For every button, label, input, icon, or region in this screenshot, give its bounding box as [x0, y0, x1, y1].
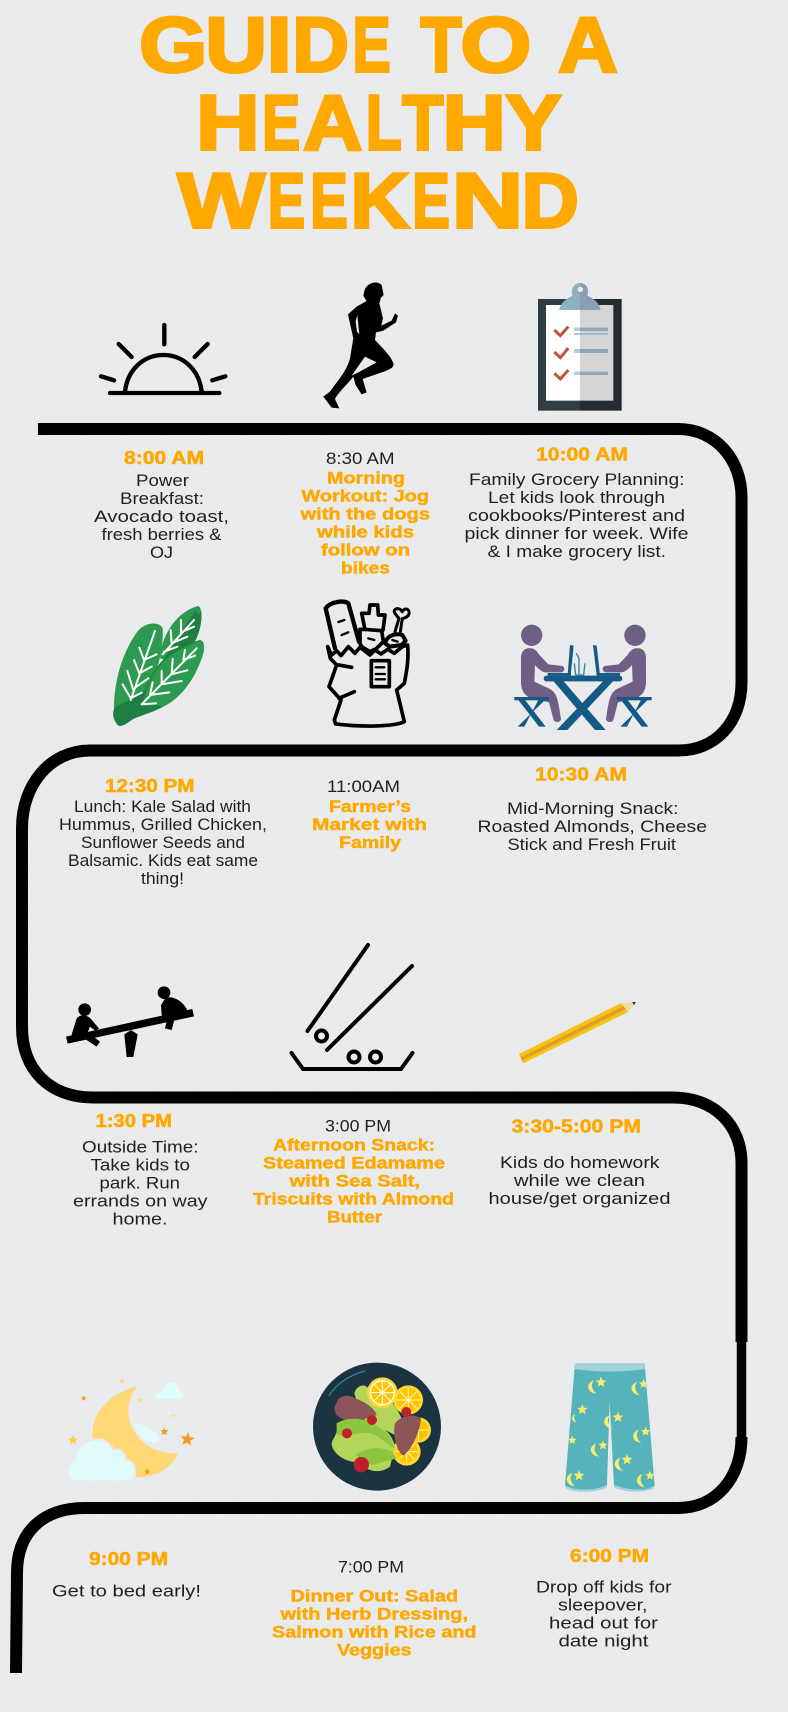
- title: E: [268, 156, 305, 244]
- icon: grocery bag: [326, 602, 409, 726]
- icon: kale leaves: [113, 606, 204, 726]
- column: 6:00 PM date night: sleepover,: [558, 1596, 648, 1614]
- column: 3:30-5:00 PM homework: Kids do homework: [500, 1154, 660, 1172]
- title: E: [412, 156, 450, 244]
- column: 1:30 PM outside time: [73, 1111, 208, 1228]
- column: 10:30 AM mid-morning snack: Roasted Almonds, Cheese: [478, 818, 707, 836]
- column: 6:00 PM date night: head out for: [549, 1614, 659, 1632]
- column: 8:30 AM morning workout: bikes: [341, 560, 390, 578]
- title: T: [420, 0, 462, 88]
- column: 12:30 PM lunch: thing!: [141, 870, 184, 888]
- title: E: [352, 0, 391, 88]
- column: 3:30-5:00 PM homework: 3:30-5:00 PM: [512, 1116, 641, 1136]
- column: 10:00 AM family grocery planning: 10:00 AM: [536, 444, 628, 464]
- icon: moon, clouds and stars: [68, 1378, 195, 1481]
- title: [139, 0, 618, 244]
- column: 11:00AM farmer's market: [312, 778, 427, 852]
- column: 8:00 AM breakfast: 8:00 AM: [124, 448, 204, 468]
- column: 8:30 AM morning workout: Morning: [327, 470, 405, 488]
- column: 6:00 PM date night: date night: [558, 1632, 649, 1650]
- title: W: [178, 156, 265, 244]
- column: 8:00 AM breakfast: Breakfast:: [120, 490, 204, 508]
- column: 12:30 PM lunch: [59, 776, 267, 888]
- column: 10:00 AM family grocery planning: [464, 444, 688, 561]
- column: 7:00 PM dinner out: with Herb Dressing,: [279, 1606, 468, 1624]
- column: 3:00 PM afternoon snack: Butter: [327, 1208, 383, 1226]
- column: 8:30 AM morning workout: 8:30 AM: [326, 450, 394, 468]
- column: 7:00 PM dinner out: Veggies: [337, 1642, 412, 1660]
- column: 1:30 PM outside time: 1:30 PM: [96, 1111, 172, 1131]
- runner leg gap: [352, 357, 377, 376]
- column: 11:00AM farmer's market: Family: [339, 834, 402, 852]
- title: Y: [506, 78, 562, 166]
- icon: salad plate: [313, 1363, 441, 1491]
- title: E: [262, 78, 300, 166]
- title: N: [452, 156, 523, 244]
- column: 10:30 AM mid-morning snack: 10:30 AM: [535, 764, 627, 784]
- icon: seesaw with kids: [66, 986, 194, 1057]
- column: 6:00 PM date night: [536, 1546, 672, 1650]
- column: 8:00 AM breakfast: Avocado toast,: [94, 508, 229, 526]
- title: H: [442, 78, 506, 166]
- column: 12:30 PM lunch: 12:30 PM: [105, 776, 194, 796]
- column: 9:00 PM bedtime: Get to bed early!: [52, 1582, 201, 1600]
- column: 8:30 AM morning workout: follow on: [321, 542, 410, 560]
- column: 10:00 AM family grocery planning: Let kids look through: [488, 489, 665, 507]
- column: 10:30 AM mid-morning snack: [478, 764, 707, 854]
- icon: pencil: [519, 1002, 636, 1064]
- column: 12:30 PM lunch: Hummus, Grilled Chicken,: [59, 816, 267, 834]
- column: 1:30 PM outside time: Outside Time:: [82, 1138, 198, 1156]
- column: 11:00AM farmer's market: Farmer’s: [329, 798, 411, 816]
- column: 8:00 AM breakfast: OJ: [150, 544, 173, 562]
- title: K: [350, 156, 410, 244]
- icon: sunrise: [101, 325, 225, 393]
- column: 6:00 PM date night: 6:00 PM: [570, 1546, 649, 1566]
- column: 10:30 AM mid-morning snack: Mid-Morning Snack:: [507, 800, 678, 818]
- column: 12:30 PM lunch: Balsamic. Kids eat same: [68, 852, 258, 870]
- column: 3:30-5:00 PM homework: while we clean: [513, 1172, 645, 1190]
- column: 7:00 PM dinner out: [272, 1558, 476, 1660]
- column: 1:30 PM outside time: home.: [112, 1210, 168, 1228]
- title: D: [522, 156, 579, 244]
- column: 7:00 PM dinner out: Dinner Out: Salad: [290, 1588, 458, 1606]
- title: A: [558, 0, 618, 88]
- column: 3:00 PM afternoon snack: [253, 1118, 454, 1226]
- column: 1:30 PM outside time: park. Run: [100, 1174, 180, 1192]
- column: 7:00 PM dinner out: Salmon with Rice and: [272, 1624, 476, 1642]
- column: 8:00 AM breakfast: fresh berries &: [102, 526, 222, 544]
- column: 10:00 AM family grocery planning: pick dinner for week. Wife: [464, 525, 688, 543]
- column: 10:30 AM mid-morning snack: Stick and Fresh Fruit: [508, 836, 676, 854]
- icon: chopsticks with edamame: [292, 945, 412, 1069]
- column: 1:30 PM outside time: errands on way: [73, 1192, 208, 1210]
- title: G: [139, 0, 207, 88]
- column: 3:30-5:00 PM homework: house/get organized: [488, 1190, 670, 1208]
- column: 8:30 AM morning workout: while kids: [316, 524, 414, 542]
- title: A: [303, 78, 362, 166]
- column: 1:30 PM outside time: Take kids to: [90, 1156, 190, 1174]
- column: 12:30 PM lunch: Sunflower Seeds and: [81, 834, 245, 852]
- column: 8:00 AM breakfast: [94, 448, 229, 562]
- column: 10:00 AM family grocery planning: cookbooks/Pinterest and: [468, 507, 685, 525]
- column: 3:00 PM afternoon snack: Afternoon Snack:: [273, 1136, 435, 1154]
- column: 8:30 AM morning workout: [299, 450, 430, 578]
- column: 3:30-5:00 PM homework: [488, 1116, 670, 1208]
- title: E: [310, 156, 348, 244]
- icon: runner silhouette: [323, 282, 398, 408]
- icon: clipboard checklist: [538, 283, 622, 411]
- title: D: [292, 0, 349, 88]
- column: 8:30 AM morning workout: Workout: Jog: [302, 488, 429, 506]
- column: 6:00 PM date night: Drop off kids for: [536, 1578, 672, 1596]
- column: 8:30 AM morning workout: with the dogs: [299, 506, 430, 524]
- column: 11:00AM farmer's market: Market with: [312, 816, 427, 834]
- column: 3:00 PM afternoon snack: Triscuits with Almond: [253, 1190, 454, 1208]
- column: 8:00 AM breakfast: Power: [136, 472, 190, 490]
- column: 3:00 PM afternoon snack: 3:00 PM: [325, 1118, 391, 1136]
- title: U: [205, 0, 267, 88]
- column: 12:30 PM lunch: Lunch: Kale Salad with: [74, 798, 251, 816]
- column: 11:00AM farmer's market: 11:00AM: [327, 778, 400, 796]
- column: 9:00 PM bedtime: 9:00 PM: [89, 1549, 168, 1569]
- column: 3:00 PM afternoon snack: Steamed Edamame: [263, 1154, 445, 1172]
- title: O: [460, 0, 531, 88]
- icon: two people at table: [514, 625, 652, 730]
- title: I: [267, 0, 292, 88]
- column: 10:00 AM family grocery planning: & I make grocery list.: [488, 543, 666, 561]
- icon: pajama pants with moons and stars: [565, 1363, 655, 1492]
- column: 10:00 AM family grocery planning: Family Grocery Planning:: [469, 471, 684, 489]
- title: L: [366, 78, 402, 166]
- timeline path: [16, 429, 742, 1673]
- column: 3:00 PM afternoon snack: with Sea Salt,: [288, 1172, 420, 1190]
- column: 7:00 PM dinner out: 7:00 PM: [338, 1558, 404, 1576]
- title: H: [196, 78, 260, 166]
- column: 9:00 PM bedtime: [52, 1549, 201, 1600]
- title: T: [402, 78, 444, 166]
